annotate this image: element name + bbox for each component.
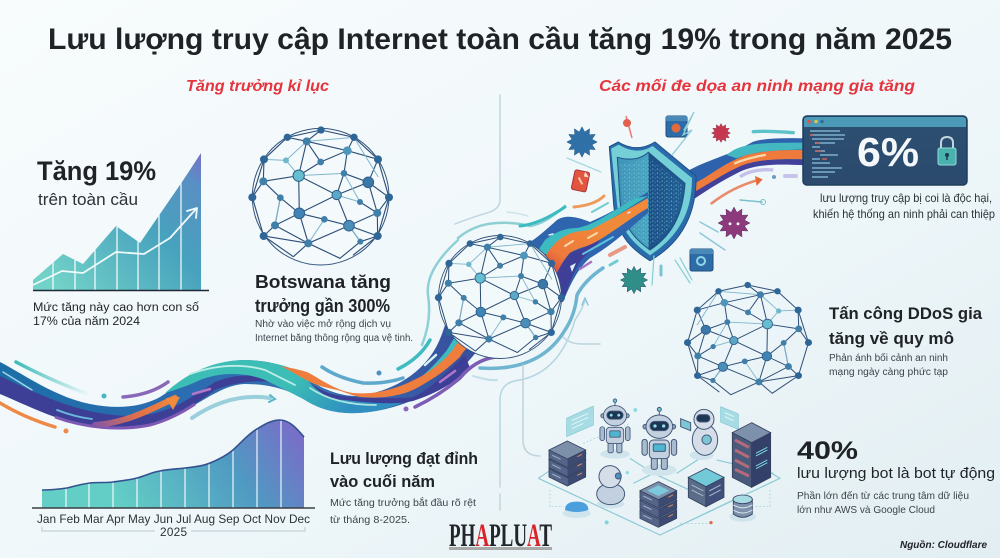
icon: red virus xyxy=(712,124,730,142)
text: DDoS: Phản ánh bối cảnh an ninh xyxy=(829,352,948,364)
network platform xyxy=(538,423,780,535)
icon: blue virus xyxy=(567,127,597,157)
illustration: bots and data centres xyxy=(538,399,780,535)
text: peak at year end: vào cuối năm xyxy=(330,472,435,491)
text: growth 19% xyxy=(33,156,200,328)
source note: Nguồn: Cloudflare xyxy=(900,539,987,551)
area chart: monthly traffic 2025 xyxy=(32,410,315,539)
network sphere: Botswana xyxy=(248,126,393,265)
server stack centre xyxy=(640,482,677,527)
robot right xyxy=(681,409,718,460)
text: DDoS: mạng ngày càng phức tạp xyxy=(829,367,948,378)
orange growth arrow xyxy=(95,397,180,425)
trend arrow xyxy=(33,208,197,285)
text: Botswana: trưởng gần 300% xyxy=(255,295,390,316)
panel: 6% malicious traffic xyxy=(803,116,967,185)
text: growth 19%: 17% của năm 2024 xyxy=(33,316,141,328)
text: peak at year end xyxy=(330,449,478,526)
text: 40% bots: 40% xyxy=(797,437,858,465)
text: peak at year end: từ tháng 8-2025. xyxy=(330,514,410,526)
ribbon right behind shield xyxy=(687,131,807,203)
text: peak at year end: Mức tăng trưởng bắt đầu rõ rệt xyxy=(330,496,476,509)
year bracket: 2025 xyxy=(160,525,187,539)
text: 40% bots xyxy=(797,437,995,516)
area chart: global 19% growth xyxy=(33,150,209,290)
text: growth 19%: Mức tăng này cao hơn con số xyxy=(33,302,200,314)
icon: padlock xyxy=(938,137,956,165)
ribbon right in front of shield xyxy=(520,192,648,302)
robot lower xyxy=(597,466,625,508)
text: 40% bots: lưu lượng bot là bot tự động xyxy=(797,465,995,482)
icon: bug window xyxy=(666,116,687,137)
database cylinder xyxy=(729,495,756,522)
heading: record growth: Tăng trưởng kỉ lục xyxy=(186,78,329,95)
text: Botswana: Nhờ vào việc mở rộng dịch vụ xyxy=(255,319,391,330)
network sphere: centre xyxy=(435,234,565,358)
small orange arrow xyxy=(712,176,763,203)
month labels: Jan Feb Mar Apr May Jun Jul Aug Sep Oct Nov Dec xyxy=(37,512,310,526)
ribbon: left data stream xyxy=(0,325,478,428)
text: Botswana: Botswana tăng xyxy=(255,271,391,292)
teal upper band xyxy=(403,328,466,390)
text: growth 19%: Tăng 19% xyxy=(37,156,156,186)
text: DDoS xyxy=(829,304,983,378)
icon: red pin xyxy=(623,116,632,138)
robot left xyxy=(600,399,630,459)
text: 40% bots: lớn như AWS và Google Cloud xyxy=(797,505,935,516)
icon: purple virus xyxy=(718,207,750,239)
text: growth 19%: trên toàn cầu xyxy=(38,190,138,209)
text: Botswana: Internet băng thông rộng qua vệ tinh. xyxy=(255,333,413,344)
server cube xyxy=(688,468,724,507)
server stack left xyxy=(549,441,586,486)
chat panels xyxy=(567,406,738,437)
text: 40% bots: Phần lớn đến từ các trung tâm dữ liệu xyxy=(797,490,969,502)
shield xyxy=(609,142,696,261)
icon: infected file xyxy=(571,170,590,192)
server tower xyxy=(732,423,771,487)
decorative swooshes left xyxy=(0,340,495,427)
navy band xyxy=(310,355,470,403)
robot centre xyxy=(642,407,677,476)
title: Lưu lượng truy cập Internet toàn cầu tăng 19% trong năm 2025 xyxy=(48,23,952,56)
logo: Pháp Luật: PHAPLUAT xyxy=(449,518,552,554)
text: 6% caption xyxy=(813,191,995,221)
icon: green virus xyxy=(620,266,648,294)
text: DDoS: tăng về quy mô xyxy=(829,329,954,348)
text: Botswana xyxy=(255,271,413,344)
text: peak at year end: Lưu lượng đạt đỉnh xyxy=(330,449,478,468)
network sphere: DDoS xyxy=(684,282,812,395)
panel: 6% malicious traffic: 6% xyxy=(857,129,919,175)
teal band xyxy=(165,360,413,413)
cloud device xyxy=(563,502,591,518)
year bracket xyxy=(42,525,305,539)
orange band xyxy=(280,325,470,398)
text: DDoS: Tấn công DDoS gia xyxy=(829,304,983,323)
icon: gear window xyxy=(690,249,713,271)
connector lines and arcs xyxy=(422,95,603,510)
threat icons around the shield xyxy=(520,112,798,294)
heading: rising cyber threats: Các mối đe dọa an ninh mạng gia tăng xyxy=(599,78,915,95)
